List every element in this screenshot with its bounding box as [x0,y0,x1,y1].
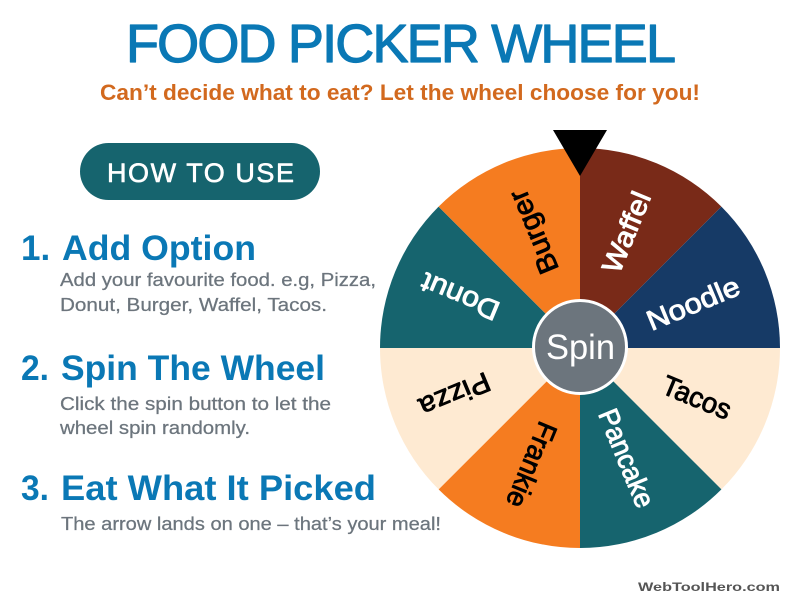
step 1: add option: Donut, Burger, Waffel, Tacos. [60,295,327,315]
segment: burger [439,148,580,348]
pointer arrow [553,130,607,176]
step 1: add option: 1. [21,229,50,268]
segment: noodle [580,207,780,348]
step 1: add option: Add Option [62,229,256,268]
spinner wheel [380,148,780,548]
segment: donut [380,207,580,348]
footer brand: WebToolHero.com [638,580,780,594]
segment: pizza: Pizza [414,366,495,423]
segment: frankie: Frankie [500,417,563,512]
step 2: spin the wheel: Spin The Wheel [61,349,325,388]
step 1: add option [21,229,376,315]
segment: donut: Donut [416,266,504,327]
segment: pancake [580,348,721,548]
segment: waffel: Waffel [596,187,657,277]
step 3: eat what it picked [21,469,441,534]
step 2: spin the wheel [21,349,331,438]
segment: noodle: Noodle [642,270,744,337]
segment: pizza [380,348,580,489]
step 3: eat what it picked: 3. [21,469,49,508]
step 2: spin the wheel: Click the spin button to let the [60,394,331,414]
spin button [534,300,626,394]
how to use badge: HOW TO USE [107,158,294,188]
segment: frankie [439,348,580,548]
step 3: eat what it picked: The arrow lands on one – that’s your meal! [61,514,441,534]
segment: burger: Burger [502,185,565,278]
title: FOOD PICKER WHEEL [126,14,676,74]
how to use badge [80,143,320,200]
segment: waffel [580,148,721,348]
segment: tacos [580,348,780,489]
segment: tacos: Tacos [658,369,736,426]
step 3: eat what it picked: Eat What It Picked [61,469,376,508]
step 2: spin the wheel: wheel spin randomly. [59,418,250,438]
spin button: Spin [546,328,615,367]
step 2: spin the wheel: 2. [21,349,49,388]
segment: pancake: Pancake [592,404,661,512]
subtitle: Can’t decide what to eat? Let the wheel choose for you! [100,80,700,105]
step 1: add option: Add your favourite food. e.g, Pizza, [60,270,376,290]
